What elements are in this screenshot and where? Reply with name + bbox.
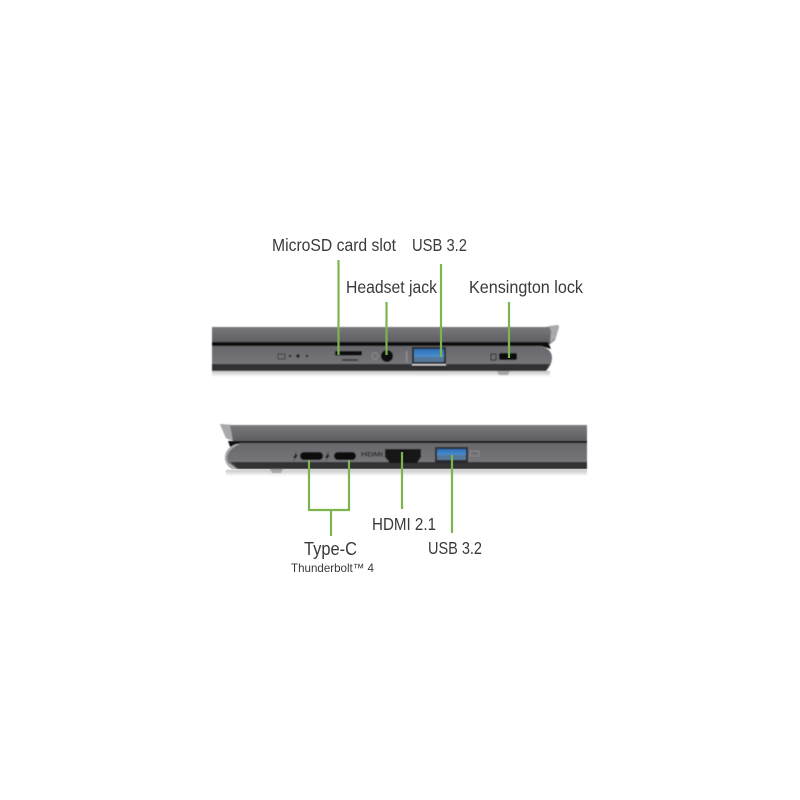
hinge seam <box>228 441 587 452</box>
shadow under laptop <box>212 371 550 377</box>
laptop: right side view <box>220 424 587 476</box>
label: Type-C: Type-C <box>304 539 357 559</box>
headset jack <box>372 350 393 362</box>
status indicator icons <box>278 354 308 359</box>
USB icon <box>470 451 479 456</box>
base body <box>226 443 587 469</box>
green leader lines <box>309 260 509 536</box>
label: USB 3.2 top: USB 3.2 <box>412 235 467 255</box>
label: Thunderbolt 4: Thunderbolt™ 4 <box>291 561 374 575</box>
label: MicroSD card slot: MicroSD card slot <box>272 235 396 255</box>
lid <box>212 325 559 344</box>
label: HDMI 2.1: HDMI 2.1 <box>372 514 436 534</box>
lid <box>220 424 587 442</box>
microSD slot <box>335 351 362 361</box>
shadow under laptop <box>226 470 587 476</box>
HDMI port <box>385 449 421 463</box>
label: Headset jack: Headset jack <box>346 277 437 297</box>
HDMI label: HDMI <box>361 452 383 458</box>
rubber foot <box>497 371 510 375</box>
laptop: left side view <box>212 325 559 377</box>
label: USB 3.2 bottom: USB 3.2 <box>428 538 482 558</box>
base body <box>212 346 552 371</box>
Type-C ports <box>300 452 356 460</box>
Thunderbolt icons <box>293 451 330 462</box>
USB port <box>406 347 446 368</box>
label: Kensington lock: Kensington lock <box>469 277 583 297</box>
USB port <box>435 447 468 463</box>
rubber foot <box>270 469 283 473</box>
Kensington lock <box>491 353 517 360</box>
hinge seam <box>212 342 551 349</box>
